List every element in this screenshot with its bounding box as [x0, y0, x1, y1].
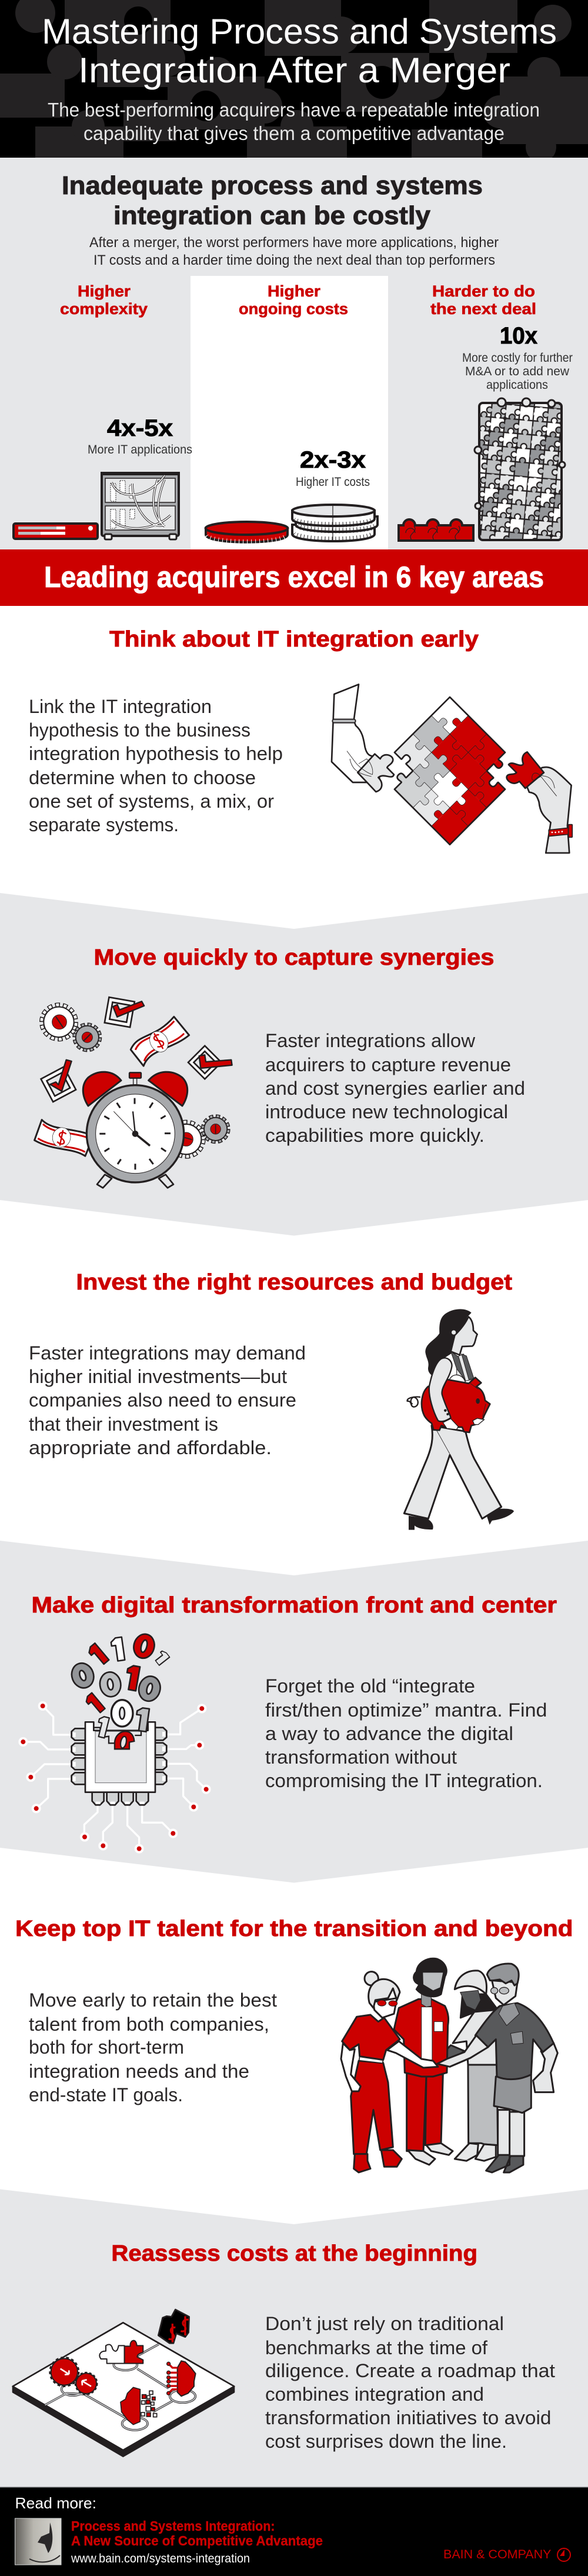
column heading: higher complexity [60, 282, 148, 318]
title: Mastering Process and Systems [42, 12, 557, 51]
read more label: Read more: [15, 2494, 96, 2512]
stat: 4x-5x: 4x-5x [107, 415, 173, 441]
body text: Move early to retain the best [29, 1990, 277, 2011]
panel: red banner [0, 549, 588, 606]
body text: integration hypothesis to help [29, 743, 283, 764]
checkbox left [41, 1067, 76, 1102]
clock hands [133, 1111, 135, 1134]
body text: transformation initiatives to avoid [265, 2407, 552, 2428]
stat: 4x-5x: More IT applications [88, 443, 192, 456]
stat: 2x-3x [296, 447, 370, 489]
gears upper left [42, 1005, 100, 1050]
piggy bank [422, 1378, 490, 1432]
body text [265, 1030, 525, 1146]
body text: and cost synergies earlier and [265, 1078, 525, 1099]
piggy tail [407, 1397, 420, 1407]
icon: stack of coins [292, 505, 377, 541]
panel: header [0, 0, 588, 162]
puzzle outer edges [376, 697, 523, 845]
column heading: higher ongoing costs: Higher [268, 282, 321, 300]
loose grey piece [358, 754, 394, 792]
report url: www.bain.com/systems-integration [71, 2552, 250, 2565]
heading: Keep top IT talent for the transition and beyond [15, 1917, 573, 1941]
hair [425, 1309, 472, 1377]
body text: both for short-term [29, 2037, 184, 2058]
assembled puzzle board [376, 697, 523, 845]
clock face [86, 1085, 184, 1182]
stat: 10x: More costly for further [462, 351, 573, 365]
checkbox right [188, 1046, 222, 1079]
falling digits [68, 1632, 170, 1738]
body text [29, 696, 283, 835]
bracelet [332, 719, 356, 723]
panel: keep top IT talent [15, 1917, 573, 2172]
back shoe [409, 1516, 433, 1530]
gears right [169, 1116, 229, 1157]
puzzle background pattern [0, 0, 588, 162]
stat: 10x [462, 323, 573, 392]
panel: reassess costs at the beginning [0, 2190, 588, 2488]
illustration: alarm clock with gears, money and checks [34, 996, 232, 1188]
illustration: isometric roadmap board [13, 2310, 234, 2457]
panel: invest the right resources and budget [29, 1270, 514, 1530]
intro text: IT costs and a harder time doing the next deal than top performers [93, 252, 495, 268]
illustration: woman carrying piggy bank [404, 1309, 514, 1530]
panel: cost of inadequate integration [0, 158, 588, 549]
heading: Make digital transformation front and center [32, 1593, 557, 1618]
icon: money bills with dollar signs [158, 2310, 189, 2343]
money note top [127, 1015, 191, 1068]
illustration: hands assembling puzzle [332, 684, 572, 853]
body text: higher initial investments—but [29, 1366, 287, 1387]
body text: diligence. Create a roadmap that [265, 2360, 555, 2381]
stat: 2x-3x: Higher IT costs [296, 475, 370, 489]
column heading: harder to do the next deal: Harder to do [432, 282, 535, 300]
icon: half gear half circuit [167, 2361, 196, 2396]
body text: Faster integrations may demand [29, 1342, 306, 1364]
intro text [89, 235, 499, 268]
body text: determine when to choose [29, 767, 256, 788]
heading: Reassess costs at the beginning [111, 2241, 477, 2266]
stat: 10x: M&A or to add new [465, 365, 570, 378]
icon: red coin [206, 522, 288, 542]
body text: Link the IT integration [29, 696, 212, 717]
Bain & Company logo: BAIN & COMPANY [443, 2548, 552, 2561]
body text: separate systems. [29, 814, 179, 835]
body text: a way to advance the digital [265, 1723, 513, 1744]
arm [429, 1358, 452, 1421]
body text [29, 1990, 277, 2105]
chip opening broken edge [94, 1728, 148, 1743]
checkbox top [105, 996, 145, 1029]
front shoe [486, 1509, 514, 1525]
trace end points [19, 1702, 210, 1852]
chip body [85, 1722, 155, 1792]
stat: 2x-3x: 2x-3x [300, 447, 366, 473]
icon: gears [51, 2358, 96, 2394]
icon: server cabinet with cables [101, 472, 180, 539]
hands [443, 1419, 458, 1429]
body text: introduce new technological [265, 1101, 508, 1122]
body text: capabilities more quickly. [265, 1125, 485, 1146]
body text: that their investment is [29, 1414, 218, 1435]
body text: appropriate and affordable. [29, 1437, 272, 1458]
subtitle [48, 99, 540, 144]
illustration: chip absorbing binary digits [19, 1632, 210, 1852]
column heading: higher ongoing costs [239, 282, 348, 318]
coin in slot [449, 1375, 466, 1382]
icon: row of red puzzle pieces [399, 519, 473, 541]
title: Integration After a Merger [78, 51, 510, 90]
person: woman in red with bun [341, 1972, 438, 2172]
body text: acquirers to capture revenue [265, 1054, 511, 1075]
clock knob [133, 1077, 137, 1087]
puzzle cells [376, 697, 523, 845]
right hand and arm [527, 767, 572, 853]
intro text: After a merger, the worst performers have more applications, higher [89, 235, 499, 251]
body text: end-state IT goals. [29, 2084, 183, 2105]
column highlight [191, 276, 388, 549]
title [42, 12, 557, 90]
body text [265, 1675, 547, 1791]
left hand and arm [332, 684, 380, 782]
icon: puzzle piece half red [99, 2341, 143, 2364]
person: bearded man in red [394, 1958, 453, 2165]
heading: Invest the right resources and budget [76, 1270, 512, 1295]
body text: cost surprises down the line. [265, 2431, 507, 2452]
body text: Forget the old “integrate [265, 1675, 475, 1697]
clock feet [97, 1175, 173, 1188]
wristwatch [549, 828, 569, 837]
heading [62, 171, 483, 230]
face [451, 1317, 477, 1355]
body text: companies also need to ensure [29, 1389, 296, 1411]
report title: A New Source of Competitive Advantage [71, 2533, 323, 2548]
column heading: higher complexity: Higher [78, 282, 131, 300]
panel: move quickly to capture synergies [0, 893, 588, 1235]
money note left [34, 1119, 95, 1157]
column heading: harder to do the next deal [430, 282, 536, 318]
icon: small red server [14, 524, 98, 539]
puzzle interlocking tabs [376, 697, 523, 845]
blouse and jacket lapels [457, 1354, 473, 1382]
clock bells [83, 1072, 121, 1106]
panel: footer [0, 2487, 588, 2576]
chip pins [72, 1728, 166, 1805]
body text [29, 1342, 306, 1458]
report title: Process and Systems Integration: [71, 2518, 275, 2534]
report title [71, 2518, 323, 2548]
subtitle: The best-performing acquirers have a repeatable integration [48, 99, 540, 121]
panel: think about IT integration early [29, 627, 572, 853]
body text: talent from both companies, [29, 2014, 269, 2035]
stat: 10x: 10x [500, 323, 537, 349]
loose red piece [507, 752, 544, 788]
person: man in grey shirt [437, 1964, 557, 2172]
column heading: higher complexity: complexity [60, 300, 148, 318]
banner text: Leading acquirers excel in 6 key areas [44, 561, 544, 594]
circuit traces [23, 1706, 206, 1849]
stat: 10x: applications [486, 378, 548, 392]
heading: Think about IT integration early [109, 627, 479, 652]
board base [13, 2322, 234, 2457]
stat: 4x-5x [88, 415, 192, 456]
body text: combines integration and [265, 2384, 484, 2405]
body text: first/then optimize” mantra. Find [265, 1699, 547, 1721]
body text: Don’t just rely on traditional [265, 2313, 504, 2334]
body text [265, 2313, 555, 2452]
illustration: team with hands together [341, 1958, 557, 2172]
body text: compromising the IT integration. [265, 1770, 543, 1791]
roadmap paths [45, 2344, 195, 2430]
icon: tall stack of puzzle pieces [475, 398, 565, 540]
heading: Inadequate process and systems [62, 171, 483, 200]
digit zero falling into chip [115, 1731, 134, 1749]
heading: integration can be costly [113, 201, 431, 230]
body text: one set of systems, a mix, or [29, 791, 274, 812]
subtitle: capability that gives them a competitive advantage [83, 122, 505, 144]
body text: integration needs and the [29, 2061, 249, 2082]
icon: half gear half pixels [121, 2387, 157, 2425]
body text: Faster integrations allow [265, 1030, 476, 1051]
body text: benchmarks at the time of [265, 2337, 487, 2358]
trousers [404, 1425, 502, 1519]
column heading: harder to do the next deal: the next deal [430, 300, 536, 318]
panel: make digital transformation front and center [0, 1541, 588, 1882]
report thumbnail [15, 2518, 61, 2565]
body text: transformation without [265, 1747, 457, 1768]
column heading: higher ongoing costs: ongoing costs [239, 300, 348, 318]
person: grey woman with cap [436, 1971, 498, 2161]
body text: hypothesis to the business [29, 719, 250, 741]
heading: Move quickly to capture synergies [94, 945, 494, 970]
